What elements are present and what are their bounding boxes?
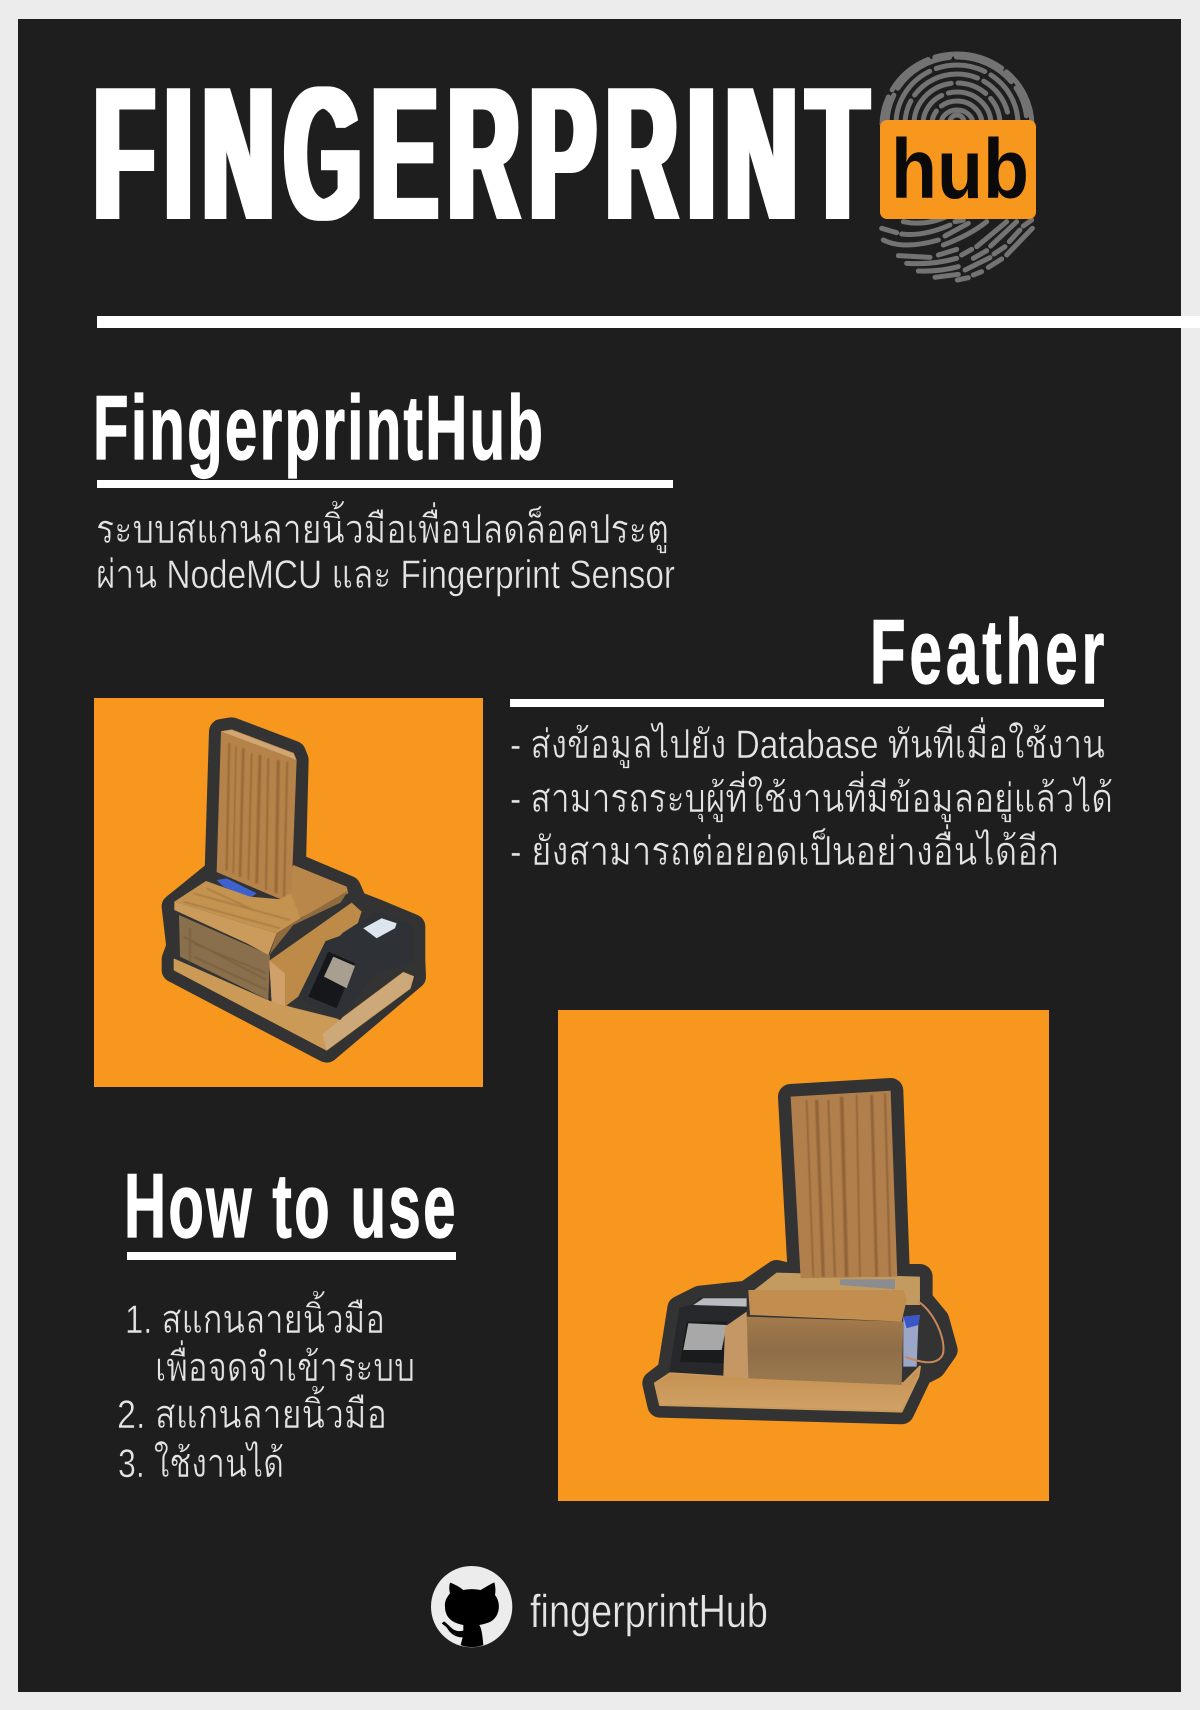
base board: [174, 959, 413, 1050]
text block: usage steps: เพื่อจดจำเข้าระบบ: [155, 1340, 415, 1390]
how to use underline: [127, 1252, 456, 1260]
box side and front: [903, 1315, 920, 1367]
text block: usage steps: 1. สแกนลายนิ้วมือ: [125, 1290, 385, 1342]
feather underline: [510, 699, 1104, 707]
icon: fingerprint with hub badge: [880, 54, 1036, 280]
top slab rear: [750, 1273, 920, 1305]
title: FINGERPRINT: FINGERPRINT: [94, 48, 868, 260]
heading underline: [97, 480, 673, 488]
front strip: [269, 903, 362, 1007]
rear of slab: [280, 865, 348, 918]
top slab: [174, 881, 301, 933]
GitHub repo name: fingerprintHub: [530, 1585, 768, 1637]
servo blue: [217, 878, 257, 898]
text block: project description: ผ่าน NodeMCU และ Fingerprint Sensor: [96, 553, 675, 597]
text block: usage steps: [117, 1290, 415, 1486]
title divider bar: [97, 316, 1200, 328]
photo panel: device side view: [558, 1010, 1049, 1501]
text block: feature list: - ยังสามารถต่อยอดเป็นอย่างอื่นได้อีก: [510, 824, 1059, 874]
text block: project description: [96, 500, 675, 597]
hub badge: hub: [891, 122, 1029, 216]
text block: usage steps: 2. สแกนลายนิ้วมือ: [117, 1385, 387, 1437]
heading: FingerprintHub: FingerprintHub: [93, 378, 543, 479]
heading: How to use: How to use: [124, 1156, 456, 1257]
fingerprint sensor module: [298, 912, 413, 1019]
box body: [179, 915, 270, 1000]
heading: Feather: Feather: [870, 602, 1104, 703]
device outline: [655, 1091, 945, 1412]
device outline: [174, 730, 413, 1050]
photo panel: device angled view: [94, 698, 483, 1087]
upright board: [217, 730, 296, 898]
icon: GitHub cat logo: [431, 1566, 512, 1647]
text block: project description: ระบบสแกนลายนิ้วมือเพื่อปลดล็อคประตู: [96, 500, 669, 553]
servo wires: [905, 1302, 944, 1362]
sensor module: [670, 1298, 747, 1375]
base board: [655, 1367, 920, 1412]
text block: feature list: [510, 717, 1113, 874]
upright board: [791, 1091, 897, 1278]
text block: usage steps: 3. ใช้งานได้: [118, 1440, 284, 1486]
